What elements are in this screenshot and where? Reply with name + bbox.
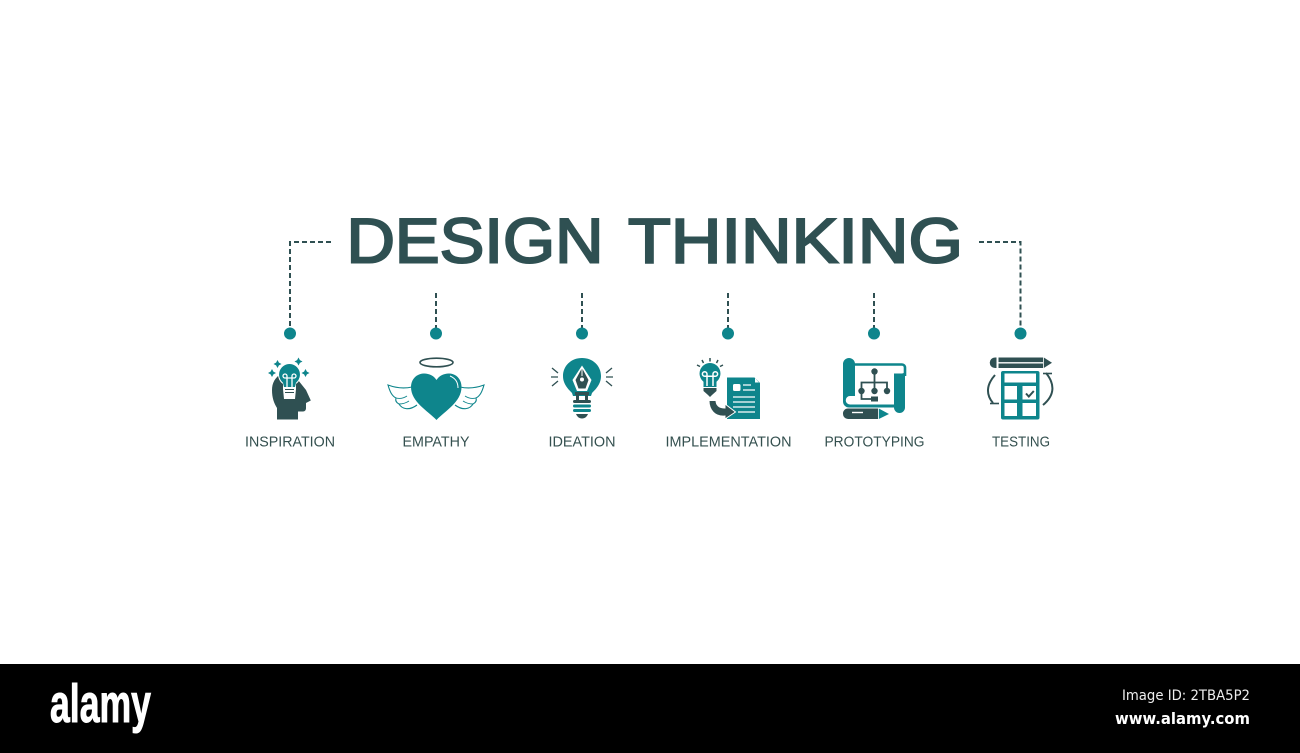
label: ideation: IDEATION xyxy=(548,434,616,450)
label: testing: TESTING xyxy=(992,434,1050,450)
label: inspiration: INSPIRATION xyxy=(245,434,335,450)
icon: prototyping blueprint and pencil xyxy=(843,358,905,419)
label: implementation: IMPLEMENTATION xyxy=(666,434,792,450)
website: www.alamy.com xyxy=(1115,709,1250,728)
title: THINKING xyxy=(628,206,963,276)
icon: testing calculator, pencil and arrows xyxy=(988,358,1052,420)
title xyxy=(346,206,963,276)
connectors: dashed lines and dots xyxy=(284,242,1026,340)
logo: alamy: alamy xyxy=(50,674,151,734)
title: DESIGN xyxy=(346,206,604,276)
footer band xyxy=(0,664,1300,753)
icon: empathy winged heart xyxy=(388,358,484,420)
label: empathy: EMPATHY xyxy=(402,434,470,450)
icon: implementation bulb and document xyxy=(697,358,760,419)
image id: Image ID: 2TBA5P2 xyxy=(1122,688,1250,704)
icon: ideation bulb with pen nib xyxy=(551,358,613,418)
icon: inspiration head with bulb xyxy=(268,358,311,420)
label: prototyping: PROTOTYPING xyxy=(824,434,924,450)
